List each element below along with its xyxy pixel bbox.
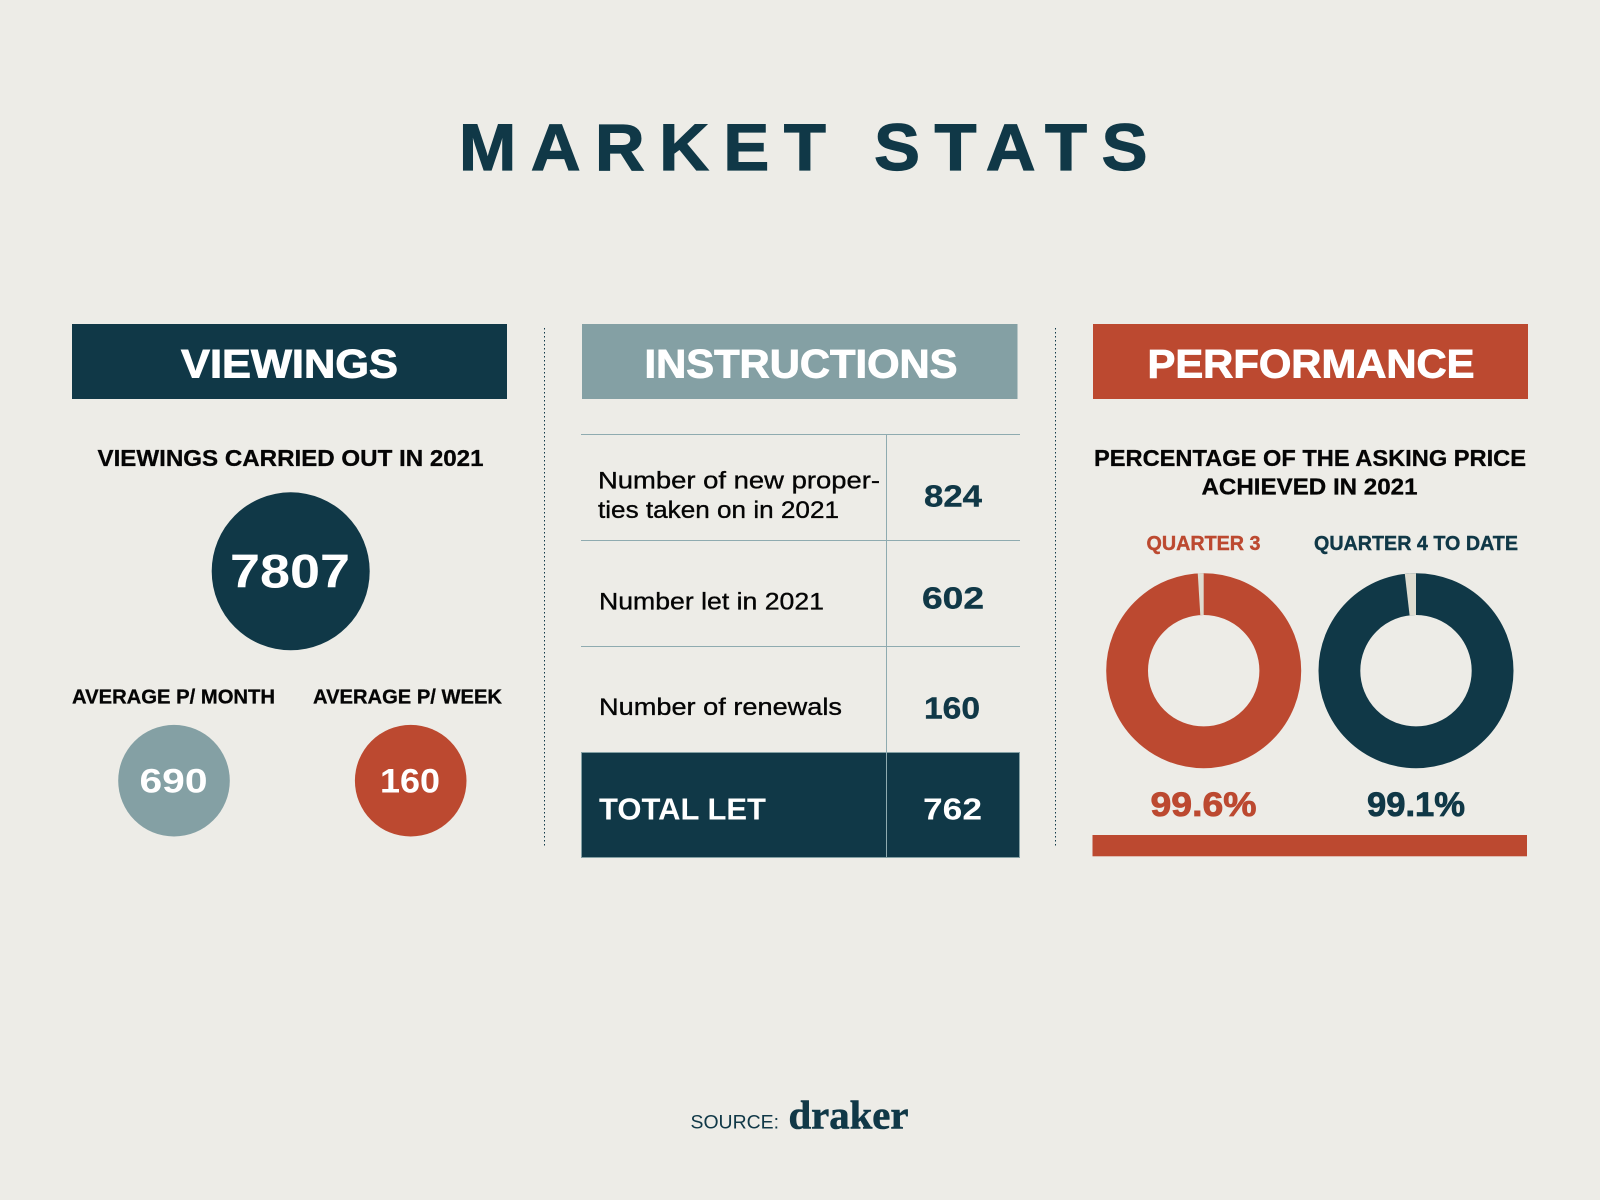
logo: draker: draker — [788, 1092, 908, 1137]
panel: performance — [1092, 324, 1528, 856]
circle: total viewings — [212, 492, 370, 650]
donut: quarter 4 — [1339, 573, 1493, 747]
panel: viewings — [72, 324, 507, 836]
performance subheading: ACHIEVED IN 2021 — [1202, 473, 1418, 499]
row: number let: 602 — [922, 580, 984, 615]
source — [690, 1092, 908, 1137]
value: quarter 4: 99.1% — [1367, 786, 1465, 824]
circle: average per month: 690 — [140, 763, 208, 801]
row: new properties: 824 — [924, 479, 983, 514]
label: average per week: AVERAGE P/ WEEK — [313, 686, 503, 708]
table — [581, 434, 1020, 858]
row: new properties — [598, 467, 983, 524]
circle: average per week: 160 — [380, 763, 440, 801]
row: total let: TOTAL LET — [599, 791, 766, 826]
row: renewals: 160 — [924, 690, 980, 725]
performance header — [1093, 324, 1528, 399]
circle: average per week — [355, 725, 467, 836]
performance subheading: PERCENTAGE OF THE ASKING PRICE — [1094, 445, 1526, 471]
circle: total viewings: 7807 — [230, 544, 350, 598]
viewings subheading: VIEWINGS CARRIED OUT IN 2021 — [98, 445, 484, 471]
label: quarter 3: QUARTER 3 — [1146, 533, 1260, 555]
row: new properties: ties taken on in 2021 — [598, 497, 839, 524]
total row background — [582, 752, 1020, 858]
row: total let — [599, 791, 982, 826]
row: number let — [599, 580, 984, 615]
performance footer bar — [1092, 835, 1527, 856]
row: renewals: Number of renewals — [599, 694, 842, 721]
instructions header — [582, 324, 1018, 399]
instructions header: INSTRUCTIONS — [644, 342, 958, 386]
row: number let: Number let in 2021 — [599, 588, 824, 615]
label: average per month: AVERAGE P/ MONTH — [72, 686, 275, 708]
circle: average per month — [118, 725, 230, 836]
row: total let: 762 — [923, 791, 982, 826]
row: new properties: Number of new proper- — [598, 467, 880, 494]
title: MARKET STATS — [459, 110, 1162, 184]
performance subheading — [1094, 445, 1526, 499]
panel: instructions — [581, 324, 1020, 858]
viewings header — [72, 324, 507, 399]
row: renewals — [599, 690, 980, 725]
viewings header: VIEWINGS — [181, 342, 398, 386]
value: quarter 3: 99.6% — [1150, 786, 1256, 824]
performance header: PERFORMANCE — [1148, 342, 1474, 386]
source: SOURCE: — [690, 1111, 779, 1133]
label: quarter 4: QUARTER 4 TO DATE — [1314, 533, 1518, 555]
donut: quarter 3 — [1127, 573, 1280, 747]
